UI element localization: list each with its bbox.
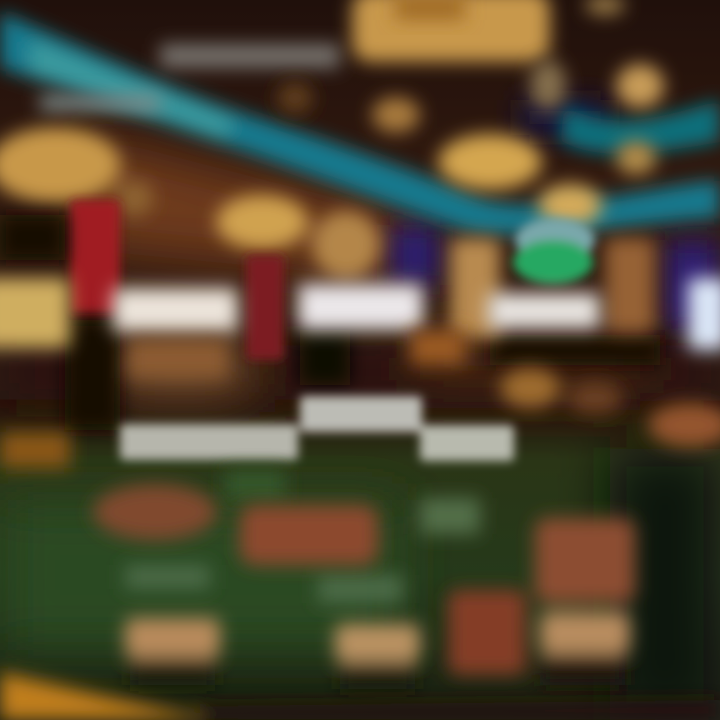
teal ribbon bbox=[0, 12, 720, 235]
heading text blur bbox=[40, 44, 340, 111]
red banners bbox=[70, 200, 284, 360]
warm reflections bbox=[0, 330, 720, 468]
table edge bbox=[0, 672, 720, 720]
tan columns bbox=[450, 238, 655, 338]
purple backdrops bbox=[390, 100, 720, 330]
chip stacks bbox=[93, 484, 635, 689]
faint table text bbox=[125, 470, 480, 603]
grey buttons bbox=[120, 396, 514, 461]
chandelier top bbox=[352, 0, 550, 62]
ceiling lamps bbox=[0, 0, 664, 279]
white signs bbox=[113, 278, 720, 350]
cream sign left bbox=[0, 278, 70, 348]
green orb bbox=[513, 218, 595, 284]
dark posts bbox=[0, 215, 660, 430]
